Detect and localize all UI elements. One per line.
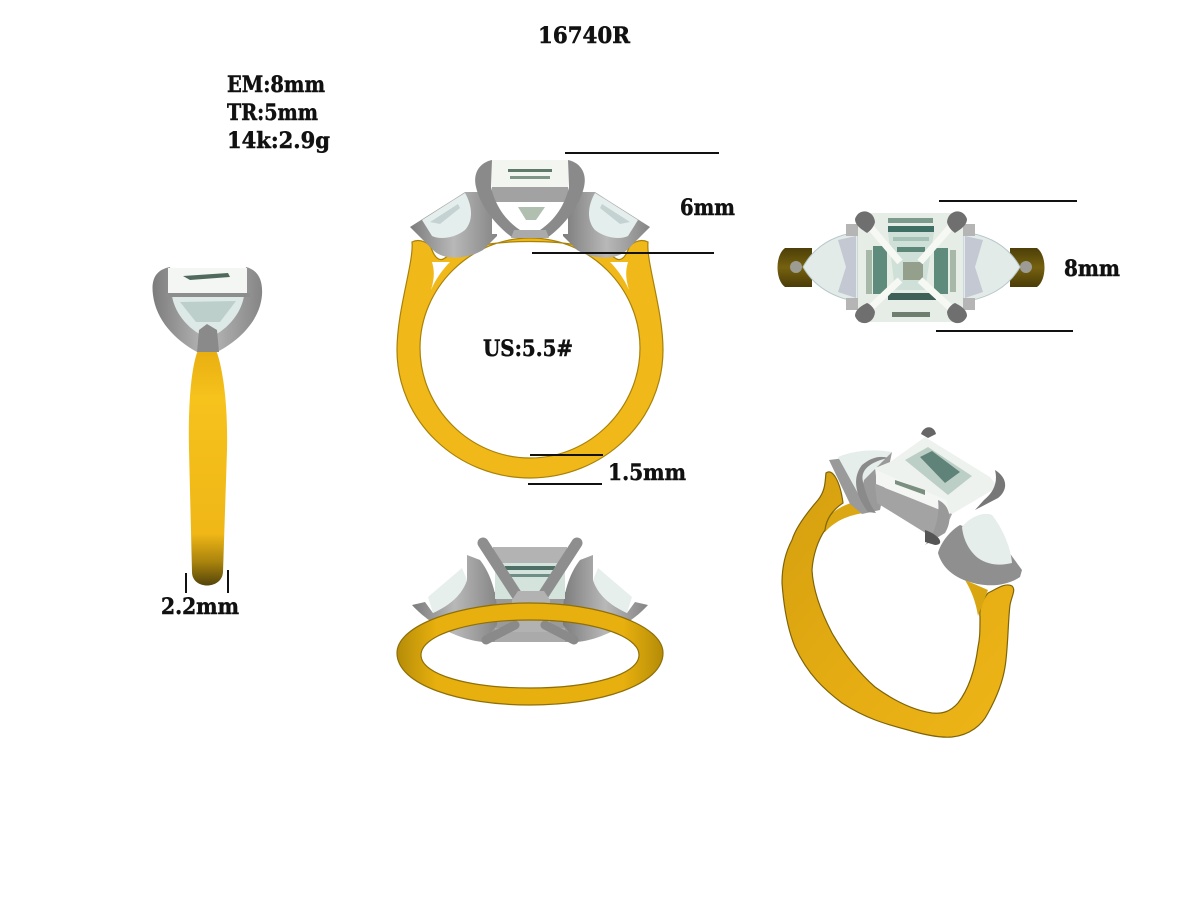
ring view: top with stones: [778, 211, 1044, 323]
perspective prongs: [856, 427, 1005, 545]
underside setting: [412, 543, 648, 642]
dimension: 6mm height: 6mm: [680, 195, 735, 221]
underside band: [397, 603, 663, 705]
side shank: [189, 350, 227, 586]
top prongs: [855, 211, 967, 323]
size label: US:5.5#: [483, 336, 573, 362]
specification text block: EM:8mm: [227, 72, 325, 98]
perspective back strand: [818, 500, 872, 532]
dimension: 8mm width: 8mm: [1064, 256, 1120, 282]
front band: [397, 238, 663, 478]
perspective back shank: [965, 580, 988, 616]
top emerald cut stone: [858, 213, 963, 322]
top band stubs: [778, 248, 1044, 287]
perspective band: [782, 472, 1014, 737]
title: 16740R: [538, 23, 631, 49]
ring view: underside perspective: [397, 543, 663, 705]
front prongs: [475, 160, 585, 238]
side setting: [153, 267, 262, 352]
top side stones: [803, 224, 1020, 310]
ring view: front with size: [397, 160, 663, 478]
ring view: three quarter perspective: [782, 427, 1022, 737]
specification text block: TR:5mm: [227, 100, 318, 126]
shoulder gaps: [431, 262, 629, 290]
dimension: 2.2mm band width: 2.2mm: [161, 594, 239, 620]
ring view: side profile: [153, 267, 262, 586]
front centre stone: [492, 160, 568, 234]
front side stones: [410, 192, 650, 258]
perspective emerald cut stone: [875, 437, 998, 537]
perspective side stones: [829, 450, 1022, 585]
dimension: 1.5mm band thickness: 1.5mm: [608, 460, 686, 486]
specification text block: 14k:2.9g: [227, 128, 330, 154]
specification text block: [227, 72, 330, 154]
dimension: 2.2mm band width: [161, 570, 239, 620]
